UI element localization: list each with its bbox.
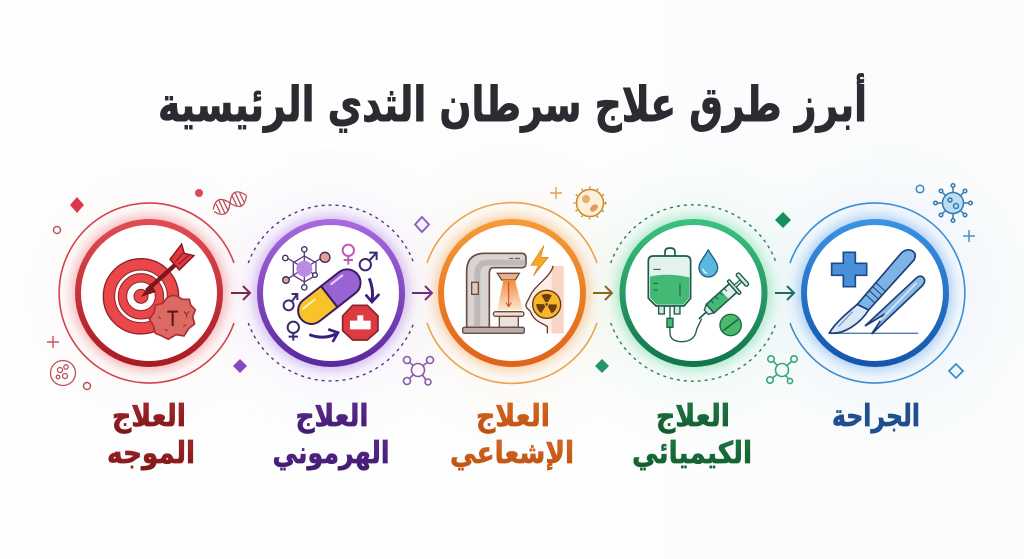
icon: blue ring bbox=[916, 185, 924, 193]
icon: capsule with hormones bbox=[283, 245, 379, 342]
panel: hormonal therapy circle bbox=[248, 205, 414, 381]
label: hormonal therapy: الهرموني bbox=[272, 436, 390, 471]
label: chemotherapy bbox=[632, 399, 752, 471]
icon: green four-point star bbox=[775, 212, 791, 228]
icon: orange plus bbox=[550, 187, 562, 199]
label: chemotherapy: الكيميائي bbox=[632, 436, 752, 471]
icon: purple diamond bbox=[233, 359, 247, 373]
panel: targeted therapy circle bbox=[59, 203, 234, 383]
label: targeted therapy bbox=[107, 399, 195, 471]
arrow: chemo to surgery bbox=[775, 286, 794, 300]
label: surgery: الجراحة bbox=[832, 399, 920, 434]
icon: small red ring bbox=[54, 226, 60, 234]
icon: hollow purple diamond bbox=[415, 217, 429, 232]
label: radiation therapy: الإشعاعي bbox=[450, 436, 574, 471]
icon: red dot bbox=[195, 189, 203, 197]
arrow: targeted to hormonal bbox=[231, 286, 250, 300]
label: radiation therapy bbox=[450, 399, 574, 471]
icon: radiation machine and breast bbox=[463, 245, 564, 333]
icon: blue virus bbox=[934, 184, 972, 222]
icon: cross, scalpel, tweezers bbox=[829, 250, 925, 334]
panel: radiation therapy circle bbox=[427, 203, 597, 383]
icon: red four-point star bbox=[70, 197, 84, 213]
panel: chemotherapy circle bbox=[611, 205, 776, 381]
icon: IV bag, syringe, drop, pill bbox=[648, 248, 750, 342]
label: radiation therapy: العلاج bbox=[476, 399, 550, 434]
label: chemotherapy: العلاج bbox=[656, 399, 730, 434]
icon: red cell bbox=[50, 360, 76, 386]
icon: purple molecule bbox=[404, 356, 434, 385]
label: hormonal therapy: العلاج bbox=[296, 399, 368, 434]
icon: green molecule bbox=[767, 356, 797, 384]
icon: orange cell bbox=[574, 188, 606, 218]
icon: red plus bbox=[47, 336, 59, 348]
icon: target with arrow and tumor bbox=[103, 244, 195, 339]
arrow: radiation to chemo bbox=[593, 286, 612, 300]
icon: blue plus bbox=[963, 230, 975, 242]
icon: blue hollow diamond bbox=[949, 364, 963, 378]
panel: surgery circle bbox=[790, 203, 965, 383]
icon: green diamond bbox=[595, 359, 609, 373]
icon: small red ring bottom bbox=[84, 382, 90, 390]
label: targeted therapy: الموجه bbox=[107, 436, 195, 471]
label: targeted therapy: العلاج bbox=[112, 399, 186, 434]
arrow: hormonal to radiation bbox=[412, 286, 432, 300]
label: hormonal therapy bbox=[272, 399, 390, 471]
icon: DNA helix bbox=[210, 188, 250, 218]
